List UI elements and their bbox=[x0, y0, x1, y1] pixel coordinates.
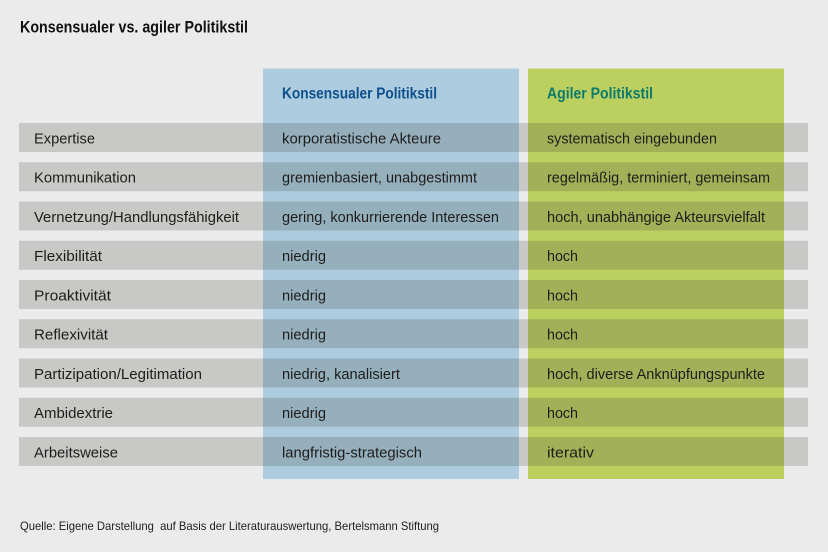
konsensualer column values: korporatistische Akteure bbox=[282, 130, 441, 148]
row labels: Partizipation/Legitimation bbox=[34, 366, 202, 383]
konsensualer column values: gremienbasiert, unabgestimmt bbox=[282, 170, 478, 186]
row labels bbox=[34, 130, 240, 462]
title: Konsensualer vs. agiler Politikstil bbox=[20, 18, 248, 36]
row labels: Proaktivität bbox=[34, 288, 112, 304]
panel: konsensualer Politikstil column bbox=[263, 68, 519, 479]
row labels: Kommunikation bbox=[34, 170, 136, 186]
konsensualer column values: niedrig bbox=[282, 288, 326, 304]
agiler column values bbox=[547, 130, 770, 462]
row labels: Flexibilität bbox=[34, 248, 103, 265]
konsensualer column values bbox=[282, 130, 499, 462]
agiler column values: hoch bbox=[547, 288, 578, 304]
row labels: Reflexivität bbox=[34, 326, 109, 344]
source note: Quelle: Eigene Darstellung auf Basis der Literaturauswertung, Bertelsmann Stiftung bbox=[20, 519, 439, 533]
agiler column values: systematisch eingebunden bbox=[547, 130, 717, 148]
agiler column values: hoch, unabhängige Akteursvielfalt bbox=[547, 209, 766, 226]
row labels: Vernetzung/Handlungsfähigkeit bbox=[34, 209, 240, 226]
agiler column values: regelmäßig, terminiert, gemeinsam bbox=[547, 170, 770, 186]
konsensualer column values: niedrig bbox=[282, 405, 326, 422]
row labels: Arbeitsweise bbox=[34, 444, 118, 462]
agiler column values: hoch bbox=[547, 248, 578, 265]
konsensualer column values: niedrig, kanalisiert bbox=[282, 366, 401, 383]
konsensualer column values: niedrig bbox=[282, 326, 326, 344]
heading: agiler Politikstil: Agiler Politikstil bbox=[547, 86, 653, 102]
row background bars bbox=[19, 123, 808, 466]
agiler column values: iterativ bbox=[547, 444, 595, 462]
row labels: Ambidextrie bbox=[34, 405, 113, 422]
agiler column values: hoch bbox=[547, 405, 578, 422]
konsensualer column values: niedrig bbox=[282, 248, 326, 265]
agiler column values: hoch, diverse Anknüpfungspunkte bbox=[547, 366, 765, 383]
row labels: Expertise bbox=[34, 130, 95, 148]
panel: agiler Politikstil column bbox=[528, 68, 784, 479]
heading: konsensualer Politikstil: Konsensualer Politikstil bbox=[282, 86, 437, 102]
agiler column values: hoch bbox=[547, 326, 578, 344]
konsensualer column values: langfristig-strategisch bbox=[282, 444, 422, 462]
konsensualer column values: gering, konkurrierende Interessen bbox=[282, 209, 499, 226]
